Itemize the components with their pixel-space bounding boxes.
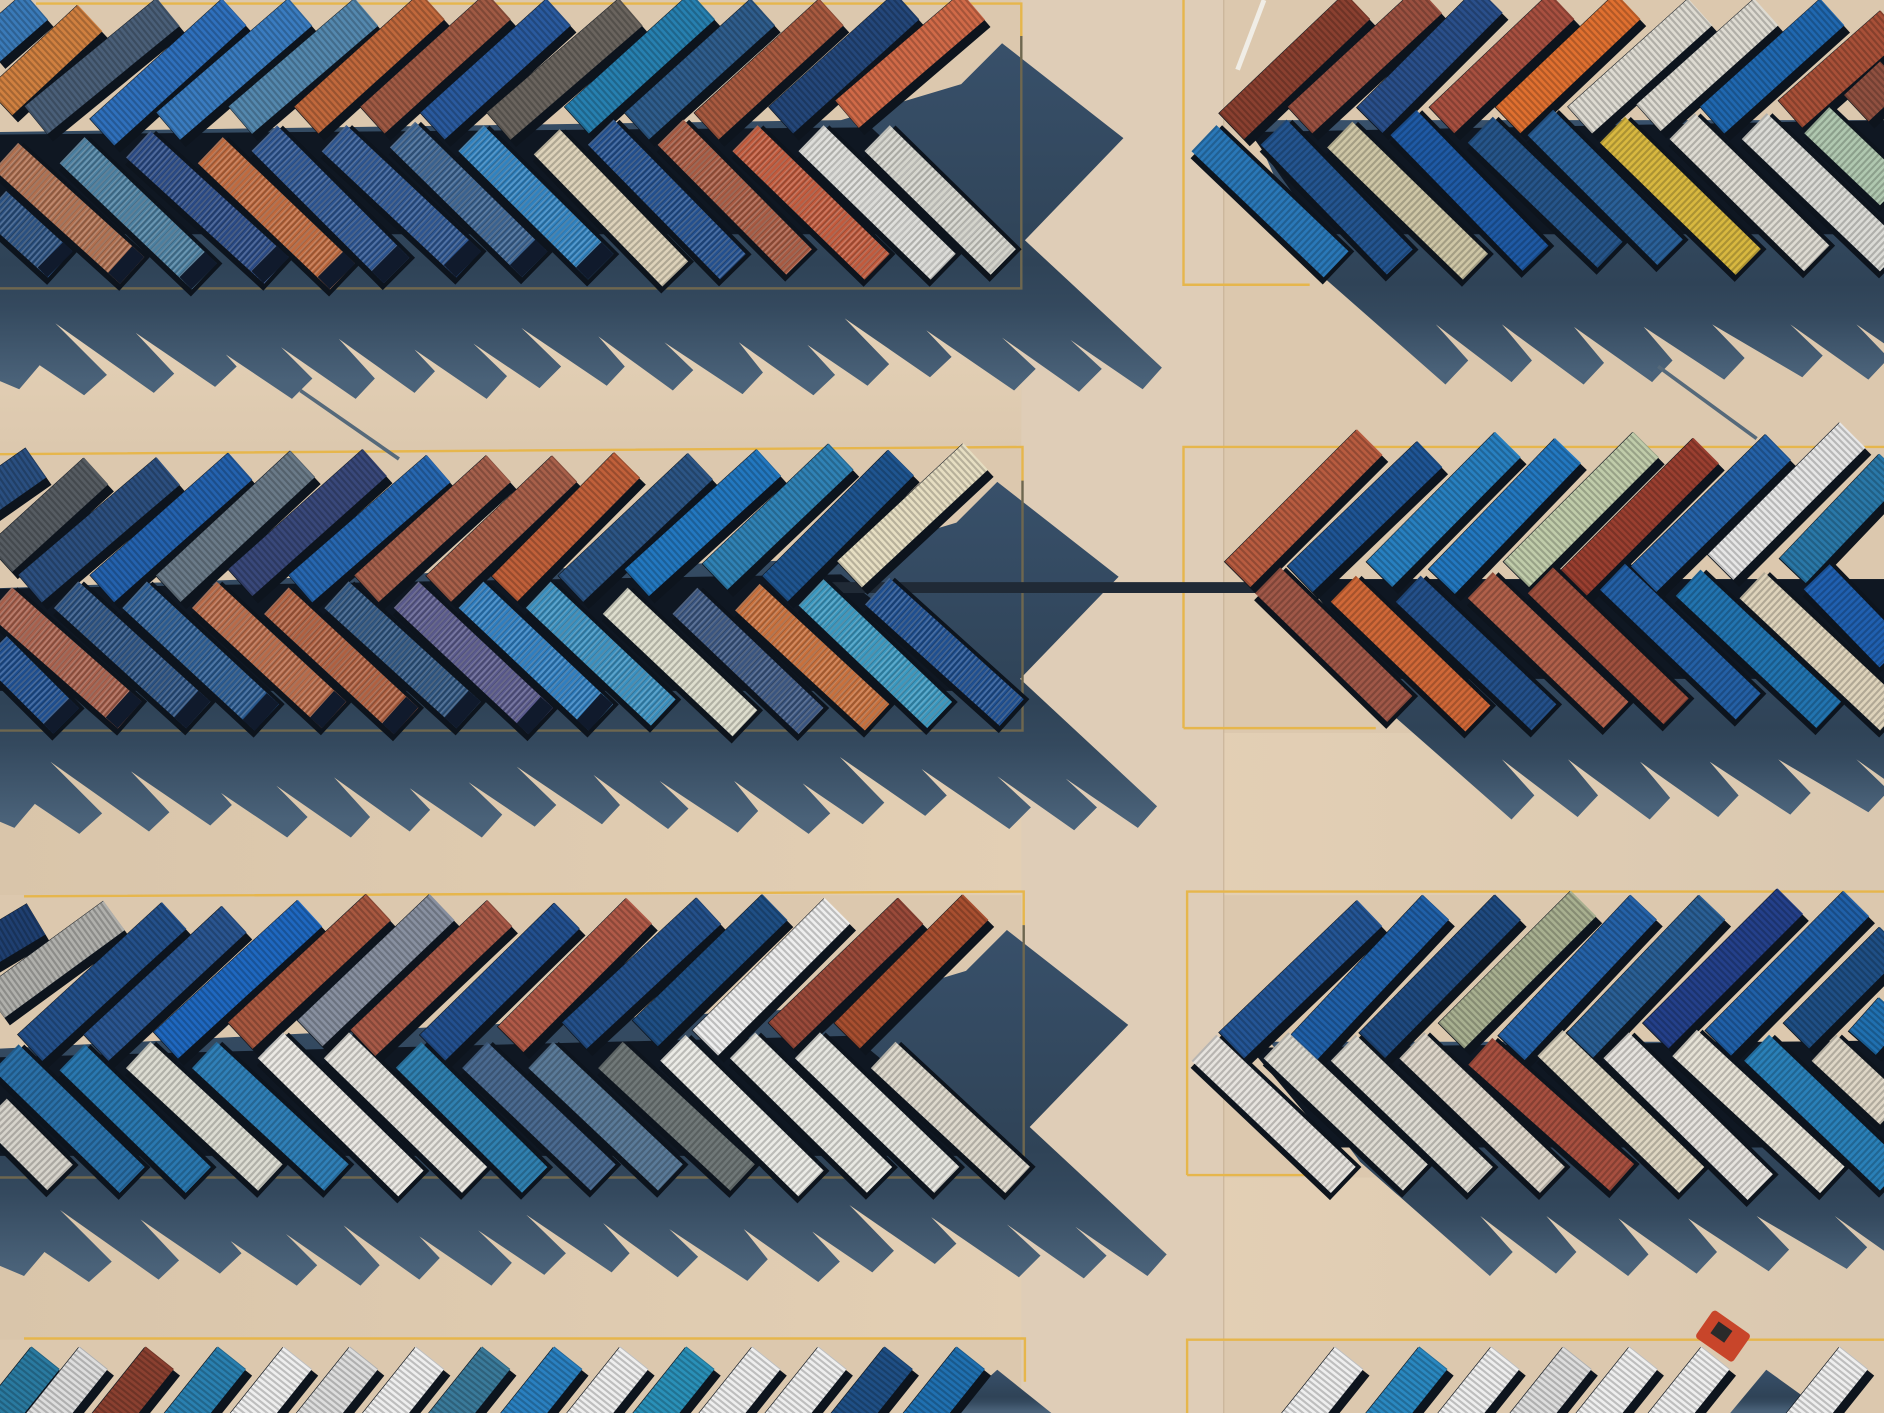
- pole shadow: left: [300, 390, 399, 459]
- light pole: [1238, 0, 1264, 70]
- container block: row 3 left: [0, 907, 1020, 1187]
- shadow: row 2 right: [1316, 579, 1884, 819]
- container block: bottom row left: [0, 1358, 973, 1413]
- shadow: row 1 right: [1250, 120, 1884, 384]
- container block: bottom row right: [1292, 1358, 1856, 1413]
- pole shadow: right: [1658, 366, 1757, 439]
- shadow: row 1 left: [0, 43, 1162, 399]
- shadow: row 3 right: [1270, 1042, 1884, 1276]
- container block: row 1 left: [0, 6, 1006, 280]
- long pole shadow across the road: [829, 583, 1268, 592]
- red reach stacker vehicle: [1695, 1309, 1751, 1363]
- container block: row 2 left: [0, 457, 1014, 727]
- shadow: bottom row right: [1730, 1370, 1826, 1413]
- shadow: row 3 left: [0, 930, 1167, 1286]
- container block: row 3 right: [1204, 901, 1884, 1191]
- shadow: bottom row left: [949, 1370, 1051, 1413]
- shadow: row 2 left: [0, 482, 1157, 837]
- container block: row 1 right: [1204, 0, 1884, 270]
- dark gaps between rows of containers: [0, 120, 1884, 1156]
- container block: row 2 right: [1238, 435, 1884, 722]
